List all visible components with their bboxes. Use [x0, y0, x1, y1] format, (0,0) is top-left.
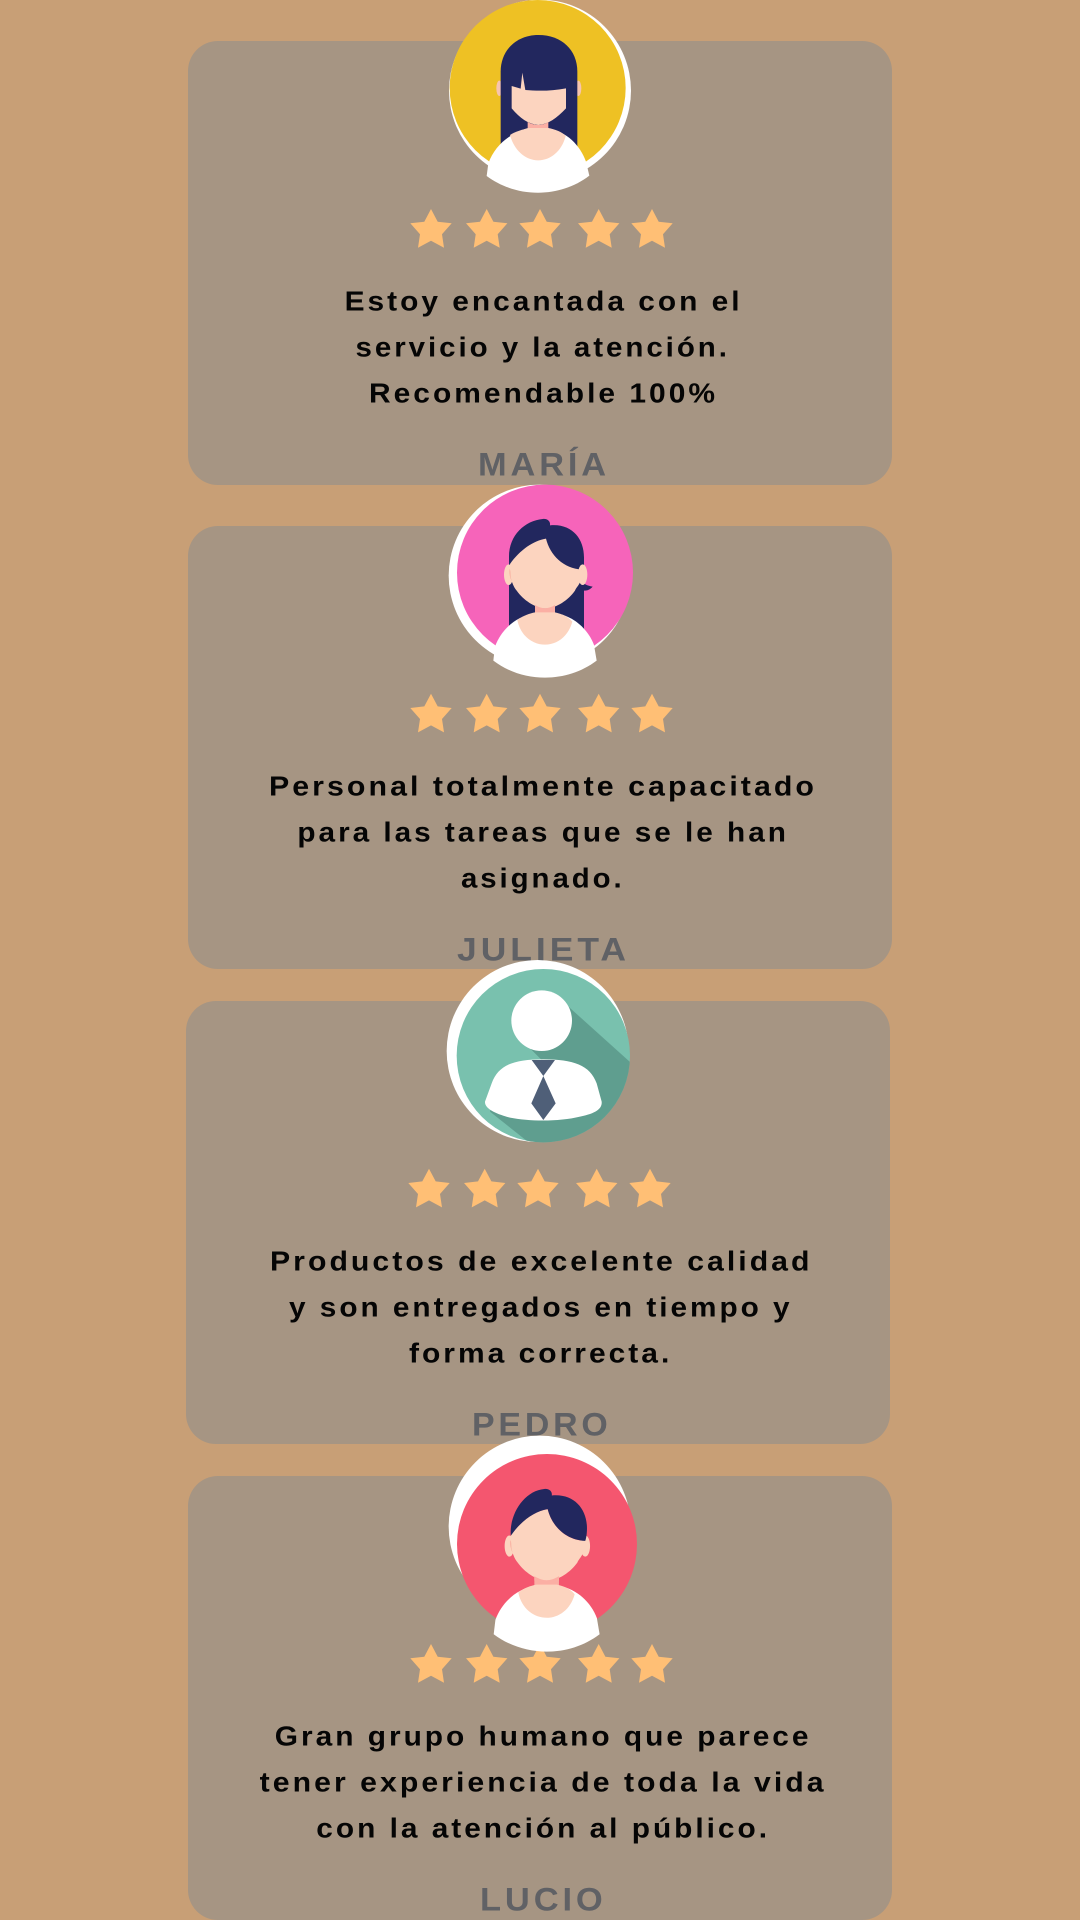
testimonial infographic	[186, 0, 892, 1920]
name: Julieta: JULIETA	[457, 932, 630, 968]
avatar: short-haired person on red background	[449, 1436, 637, 1652]
name: María: MARÍA	[478, 446, 610, 482]
quote: María	[345, 286, 743, 409]
card background: Pedro	[186, 1001, 890, 1444]
star rating: Julieta	[410, 694, 673, 732]
avatar: woman with yellow background	[449, 0, 631, 193]
card background: María	[188, 41, 892, 485]
star rating: Pedro	[408, 1169, 671, 1207]
quote: Pedro	[270, 1246, 812, 1369]
panel: María testimonial	[188, 0, 892, 485]
quote: Lucio: con la atención al público.	[316, 1812, 770, 1843]
quote: Pedro: y son entregados en tiempo y	[289, 1292, 793, 1323]
star rating: Lucio	[410, 1644, 673, 1683]
quote: Pedro: Productos de excelente calidad	[270, 1246, 812, 1277]
quote: María: Estoy encantada con el	[345, 286, 743, 317]
quote: Pedro: forma correcta.	[409, 1338, 672, 1369]
quote: Lucio: Gran grupo humano que parece	[275, 1720, 812, 1751]
card background: Julieta	[188, 526, 892, 969]
quote: María: servicio y la atención.	[356, 332, 730, 363]
name: Pedro: PEDRO	[472, 1406, 612, 1442]
quote: Julieta: asignado.	[461, 862, 625, 893]
panel: Pedro testimonial	[186, 960, 890, 1444]
card background: Lucio	[188, 1476, 892, 1920]
name: Lucio: LUCIO	[480, 1882, 607, 1918]
panel: Lucio testimonial	[188, 1436, 892, 1920]
quote: Lucio	[260, 1720, 827, 1843]
avatar: woman with pink background	[449, 485, 633, 678]
quote: Julieta	[269, 770, 817, 893]
star rating: María	[410, 209, 673, 248]
avatar: man with tie on teal background	[447, 960, 633, 1150]
panel: Julieta testimonial	[188, 485, 892, 969]
quote: María: Recomendable 100%	[369, 378, 718, 409]
quote: Lucio: tener experiencia de toda la vida	[260, 1766, 827, 1797]
quote: Julieta: para las tareas que se le han	[297, 816, 789, 847]
quote: Julieta: Personal totalmente capacitado	[269, 770, 817, 801]
